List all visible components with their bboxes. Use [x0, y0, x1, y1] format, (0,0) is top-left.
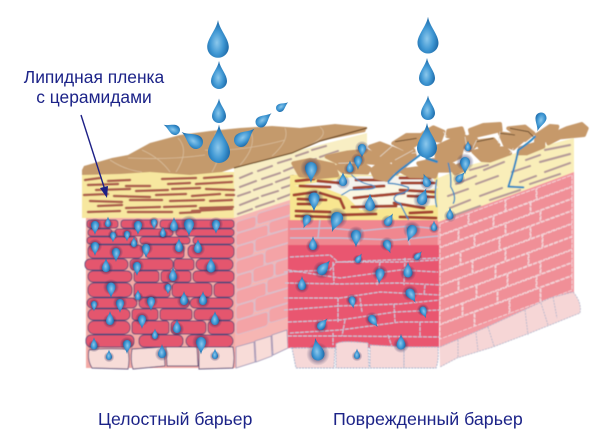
left block front cells: [85, 218, 235, 369]
label: lipid film with ceramides: [24, 67, 165, 107]
label: intact barrier: Целостный барьер: [98, 409, 253, 429]
icon: falling water drops, damaged side: [417, 17, 548, 158]
right block side face: [438, 138, 580, 367]
label: lipid film with ceramides: с церамидами: [36, 87, 152, 107]
left block front lipid layer: [82, 172, 234, 218]
right block broken brown fragments: [293, 124, 587, 219]
icon: drops inside damaged skin: [295, 140, 474, 368]
icon: falling water drops, intact side: [162, 20, 290, 163]
right block front cells: [284, 220, 440, 368]
left block side face: [234, 133, 367, 368]
label: lipid film with ceramides: Липидная пленка: [24, 67, 165, 87]
left side lipid streaks: [238, 146, 338, 214]
left block brown top surface: [82, 124, 367, 175]
right block front lipid layer: [290, 175, 438, 220]
panel: damaged barrier block: [284, 124, 587, 368]
panel: intact barrier block: [82, 124, 367, 369]
blue cracks: [342, 137, 535, 219]
label: damaged barrier: Поврежденный барьер: [333, 409, 523, 429]
icon: drops inside intact skin: [88, 215, 223, 362]
arrow: to lipid layer: [81, 115, 108, 198]
